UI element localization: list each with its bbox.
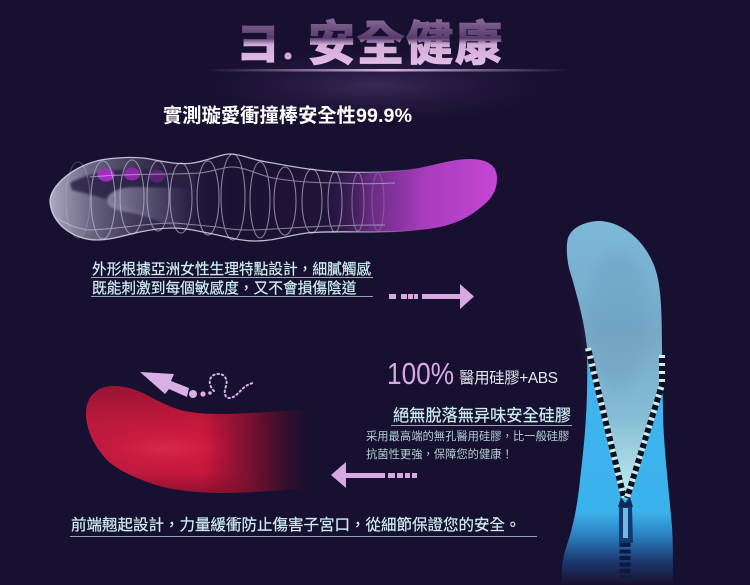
purple device with wireframe: [50, 154, 497, 241]
spec: 100% material: [387, 356, 558, 391]
text: shape description: [91, 260, 373, 297]
red device: [86, 386, 302, 493]
wire outline: [50, 154, 420, 241]
subtitle: 實測璇愛衝撞棒安全性99.9%: [163, 104, 412, 127]
zipper slider: [619, 506, 633, 543]
text: material description: 絕無脫落無异味安全硅膠: [393, 407, 571, 425]
arrow: curved up-left with dots: [140, 372, 254, 398]
zipper teeth: [588, 348, 662, 498]
text: material description: 采用最高端的無孔醫用硅膠，比一般硅膠: [366, 429, 569, 443]
text: material description: [366, 407, 572, 461]
lower body: [562, 345, 673, 585]
inner motor shape: [69, 168, 154, 200]
purple buttons: [98, 168, 114, 182]
text: front tip description: 前端翹起設計，力量緩衝防止傷害子宮口，從細節保證您的安全。: [71, 515, 521, 534]
upper body opened: [567, 221, 662, 500]
zipper lower teeth: [620, 543, 630, 578]
text: shape description: 既能刺激到每個敏感度，又不會損傷陰道: [92, 279, 357, 297]
text: material description: 抗菌性更強，保障您的健康！: [366, 447, 513, 461]
title: 安全健康: [308, 17, 502, 70]
spec: 100% material: 100%: [387, 356, 454, 391]
arrow: right: [389, 284, 474, 309]
wire rings: [57, 154, 395, 240]
text: shape description: 外形根據亞洲女性生理特點設計，細膩觸感: [92, 260, 371, 278]
title: ヨ: [236, 18, 280, 70]
blue zipper device: [562, 221, 673, 585]
arrow: left: [331, 462, 417, 488]
spec: 100% material: 醫用硅膠+ABS: [459, 369, 558, 387]
